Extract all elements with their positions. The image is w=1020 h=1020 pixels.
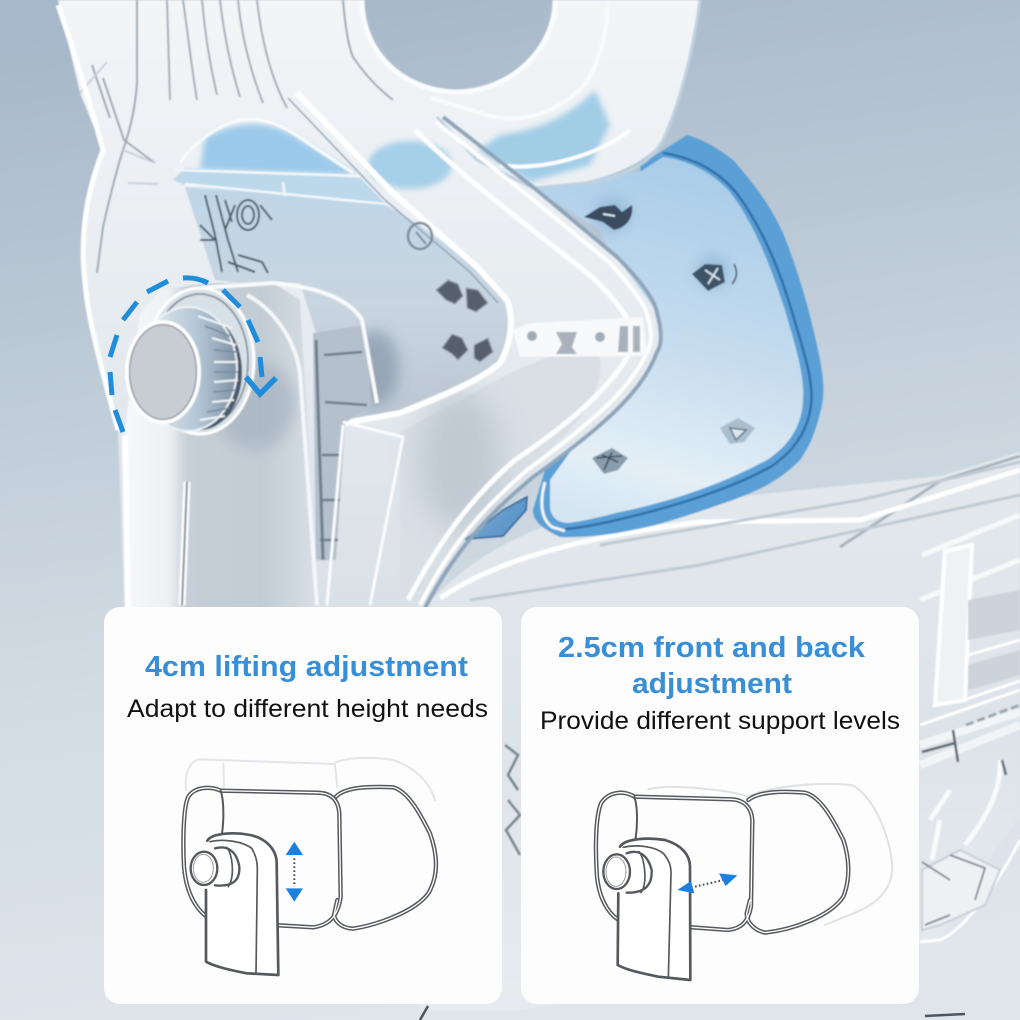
transparent shell with headrest opening: [58, 0, 700, 610]
description: support levels: Provide different support levels: [540, 707, 900, 735]
seat: [420, 452, 1020, 1010]
right arm inner blue: [478, 90, 610, 182]
pad screw: lower left: [592, 448, 628, 474]
small blue edge lower left: [466, 497, 527, 539]
diagram: headrest front and back: [596, 784, 892, 980]
top vertical ribs: [167, 0, 287, 108]
grey lower glass: [400, 340, 600, 590]
vertical dark ribs behind bracket: [313, 325, 372, 560]
inner window: [185, 187, 510, 423]
adjustment bracket: [125, 283, 403, 610]
opening rim: [362, 0, 555, 92]
diagram: headrest lifting: [183, 758, 436, 975]
panel: 4cm lifting adjustment: [104, 607, 502, 1004]
panel: 2.5cm front and back adjustment: [521, 607, 919, 1004]
blue lumbar pad: [520, 135, 823, 537]
rotation arrow: dashed blue arc: [110, 278, 276, 432]
dark contours: [92, 0, 393, 273]
dark details below panels: [420, 1006, 965, 1020]
metal plate: [513, 317, 647, 357]
description: lifting: Adapt to different height needs: [127, 695, 488, 723]
central clear band: [288, 93, 661, 608]
pad screw: upper right: [692, 256, 736, 291]
blue tinted lens: [173, 119, 452, 204]
heading: front and back: 2.5cm front and back: [558, 632, 866, 664]
adjustment knob: [127, 288, 254, 434]
heading: lifting: 4cm lifting adjustment: [145, 651, 468, 683]
pad screw: upper left: [584, 198, 632, 232]
dark shade in window: [351, 330, 399, 406]
spring and clip hardware in window: [200, 195, 493, 362]
pad screw: lower right: [720, 418, 755, 444]
dark details between panels: [505, 745, 520, 855]
heading line two: adjustment: [632, 668, 792, 700]
